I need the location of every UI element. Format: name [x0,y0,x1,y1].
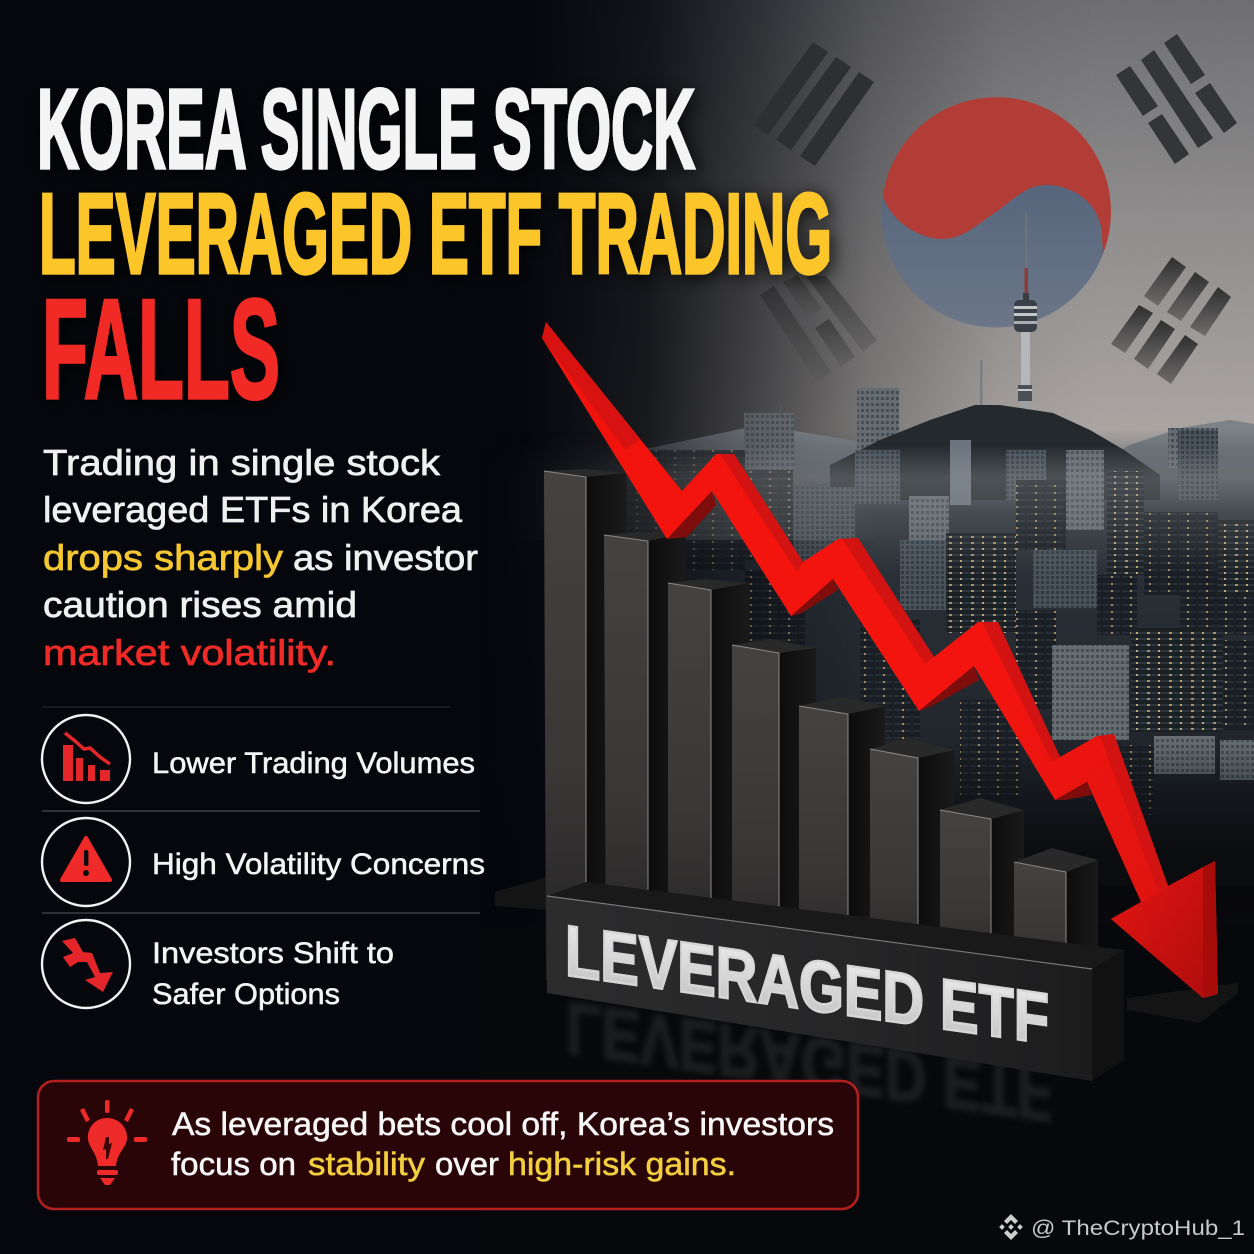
watermark [999,1214,1245,1240]
arrow body [542,322,1218,998]
arrow head [1111,867,1203,998]
bar 4 [732,639,816,980]
namsan hill [830,405,1160,500]
icon: light bulb [67,1100,147,1185]
trigram: top right [1116,34,1237,164]
N Seoul Tower [980,213,1044,420]
callout text: stability [308,1146,425,1182]
leveraged ETF plate [547,882,1124,1081]
bar 1 [544,469,626,980]
Korean flag [753,34,1237,384]
intro paragraph: as investor [293,537,478,578]
intro paragraph: leveraged ETFs in Korea [43,489,463,530]
callout text: over [435,1146,499,1182]
icon: warning triangle [42,818,130,906]
icon: falling arrow [42,920,130,1008]
bar 7 [940,798,1024,985]
trigram: bottom left faded [760,275,877,382]
intro paragraph: caution rises amid [43,584,357,625]
icon: lower trading volumes [42,715,130,803]
icon: diamond logo [999,1214,1023,1240]
callout text [171,1106,834,1182]
arrow undersides [667,491,1092,800]
reflection of plate label: LEVERAGED ETF [566,986,1052,1138]
watermark handle: @ TheCryptoHub_1 [1031,1217,1245,1240]
mid buildings [620,430,1254,815]
label: investors shift to safer options: Safer Options [152,978,340,1011]
falling red arrow [542,322,1218,998]
callout text: high-risk gains. [508,1146,736,1182]
bar chart [495,469,1238,1023]
trigram: bottom right [1111,257,1231,384]
label: high volatility concerns: High Volatility Concerns [152,848,485,881]
bar 2 [604,532,686,980]
bar 3 [668,579,749,980]
bar 5 [799,697,885,985]
bar 8 [1014,848,1098,985]
plate label: LEVERAGED ETF [565,910,1049,1060]
city skyline [585,213,1254,838]
title: FALLS [42,270,280,429]
arrow side faces [720,454,1168,891]
taegeuk circle [882,97,1111,328]
label: investors shift to safer options: Investors Shift to [152,937,394,970]
label: investors shift to safer options [152,937,394,1011]
intro paragraph [43,442,478,673]
distant mountains [648,420,1254,496]
trigram: top left [753,42,874,166]
intro paragraph: Trading in single stock [43,442,441,483]
bar 6 [870,738,954,985]
intro paragraph: drops sharply [43,537,283,578]
intro paragraph: market volatility. [43,632,336,673]
callout text: As leveraged bets cool off, Korea’s investors [172,1106,834,1142]
hazy far buildings [744,388,1218,473]
callout [38,1081,858,1209]
title [37,66,832,429]
label: lower trading volumes: Lower Trading Volumes [152,747,475,780]
callout text: focus on [171,1146,296,1182]
rear platform [495,877,1238,1023]
key points list [42,707,485,1011]
